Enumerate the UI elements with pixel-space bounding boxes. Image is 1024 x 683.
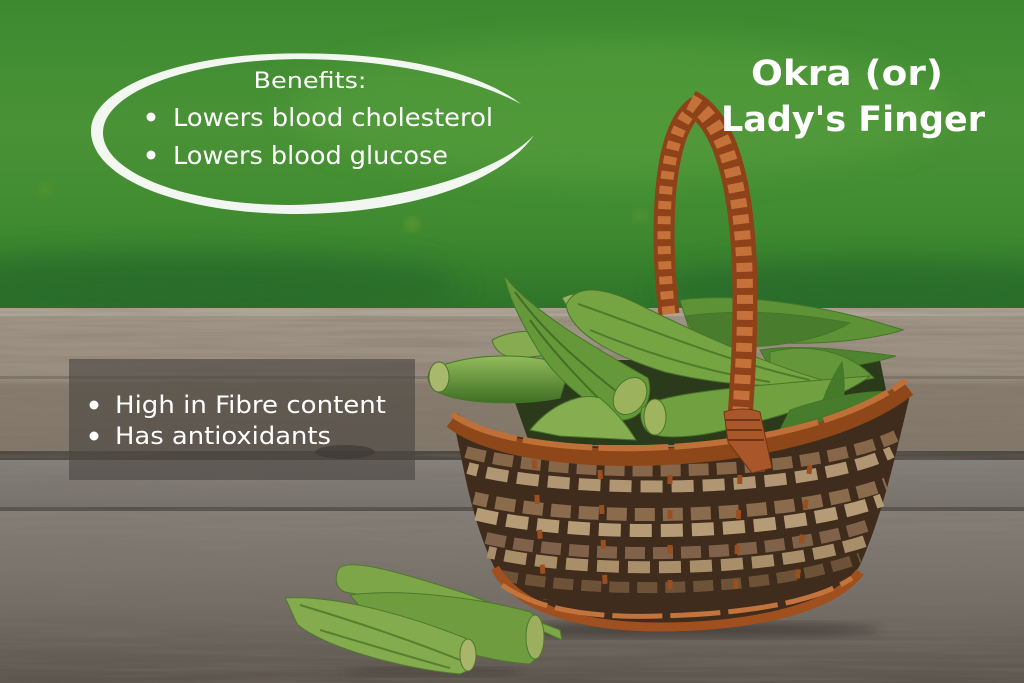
shadow inside pile (500, 360, 890, 445)
benefits text (146, 69, 493, 170)
callout: benefits oval brush stroke (91, 53, 534, 214)
title (721, 54, 986, 140)
basket handle: right side in front (690, 102, 772, 473)
benefits text: Lowers blood glucose (173, 141, 448, 170)
title: Lady's Finger (721, 100, 986, 140)
basket handle: left leg behind okra (664, 106, 697, 314)
panel: fibre and antioxidants: High in Fibre content (115, 391, 386, 419)
okra pile in basket (428, 275, 903, 440)
basket body (452, 380, 910, 628)
benefits text: Lowers blood cholesterol (173, 103, 493, 132)
background: green lawn (0, 0, 1024, 320)
title: Okra (or) (751, 54, 943, 94)
benefits text: Benefits: (254, 69, 366, 94)
background: wooden table (0, 308, 1024, 683)
panel: fibre and antioxidants: Has antioxidants (115, 422, 331, 450)
loose okra on table (285, 565, 562, 674)
panel: fibre and antioxidants (69, 359, 415, 480)
